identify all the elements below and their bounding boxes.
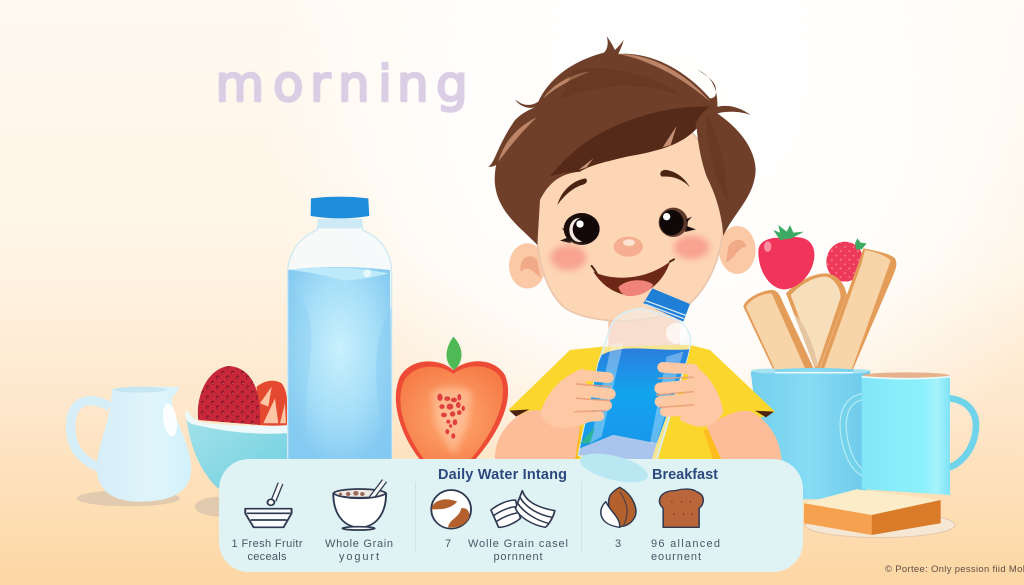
label: whole grain yogurt [325,538,393,563]
bread stick right [818,248,896,372]
heading: breakfast: Breakfast [652,467,718,483]
boy body [495,310,782,460]
cap [311,197,369,218]
label: whole grain yogurt: yogurt [339,551,379,563]
copyright note: © Portee: Only pession fiid Mob [885,564,1024,575]
icon: bowl and spoon [245,483,292,527]
neck [608,310,680,352]
teal mug [843,372,976,495]
hands and drinking bottle [540,288,723,466]
strawberry large [758,225,814,289]
label: whole grain casel pornnent: pornnent [494,551,542,563]
strawberry small [826,238,867,282]
face [536,127,724,321]
right eye [659,208,696,237]
label: three: 3 [615,538,621,550]
strawberry slice [257,381,288,427]
label: 96 allanced eournent: 96 allanced [651,538,720,550]
label: fresh fruit cereals: ceceals [248,551,287,563]
right eyebrow [660,170,690,187]
panel background [219,459,803,572]
hair [488,36,756,245]
water in bottle [580,348,689,448]
left hand [540,368,611,428]
left eye [560,213,600,245]
bottle body [578,308,691,466]
ears [509,226,756,289]
icon: round fruit [431,490,471,529]
heading: daily water: Daily Water Intang [438,467,567,483]
water [288,267,392,462]
bottle cap [643,288,690,322]
milk jug [71,386,191,506]
bottle base overlapping panel [577,448,651,488]
cup with bread sticks and strawberries [743,225,896,499]
label: fresh fruit cereals [232,538,303,563]
icon: almond [601,487,636,527]
mouth [592,259,674,296]
bread stick left [743,290,816,373]
label: 96 allanced eournent: eournent [651,551,701,563]
blue cup [751,368,870,499]
icon: cereal yogurt bowl [333,481,386,530]
label: whole grain casel pornnent: Wolle Grain casel [468,538,568,550]
yellow shirt [508,345,775,460]
right arm [707,411,782,460]
label: 96 allanced eournent [651,538,720,563]
left eyebrow [557,178,587,205]
heart shaped apple [396,337,508,462]
nose [614,237,643,257]
info panel [219,448,803,572]
whole strawberry [198,366,260,425]
label: fresh fruit cereals: 1 Fresh Fruitr [232,538,303,550]
label: whole grain yogurt: Whole Grain [325,538,393,550]
fruit bowl with strawberries [185,366,288,517]
cheeks [550,235,710,270]
icon: bread slice [659,489,703,527]
bread slice middle [786,273,847,374]
water bottle [288,197,392,462]
title: morning: morning [216,55,468,113]
left arm [495,410,580,460]
toast on plate [804,489,955,538]
right hand [657,363,723,427]
boy head [488,36,756,321]
label: whole grain casel pornnent [468,538,568,563]
label: seven: 7 [445,538,451,550]
icon: white slices [491,491,555,527]
